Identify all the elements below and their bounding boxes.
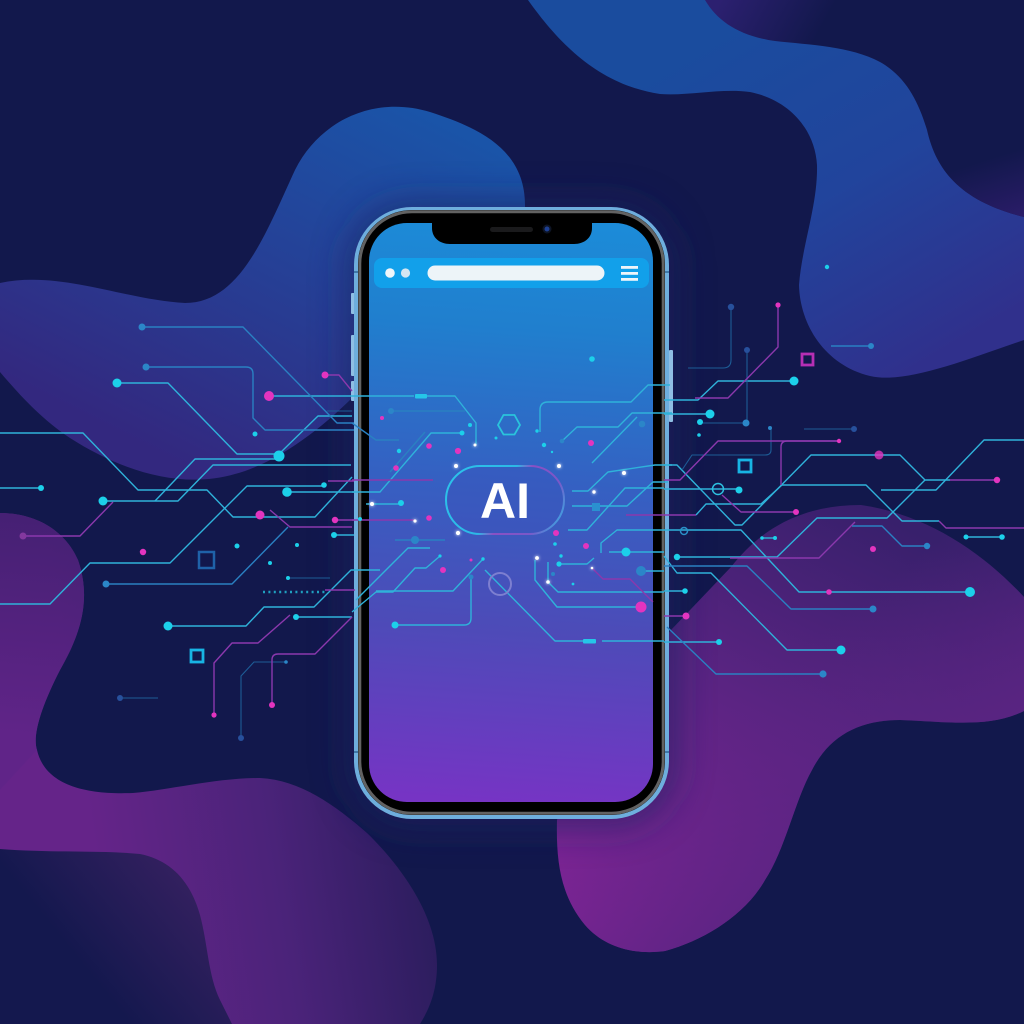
rim notches xyxy=(354,271,669,753)
square node: magenta xyxy=(802,354,813,365)
AI badge xyxy=(446,466,564,534)
dotted trace xyxy=(263,591,325,593)
notch xyxy=(432,220,592,244)
square node: small xyxy=(191,650,203,662)
bezel highlight xyxy=(360,212,663,813)
phone xyxy=(351,207,673,819)
blob: lower left upper tone xyxy=(0,513,84,790)
side buttons xyxy=(351,293,673,422)
camera xyxy=(542,224,552,234)
address field xyxy=(428,266,604,280)
screen xyxy=(369,223,653,802)
blob: lower right purple xyxy=(557,505,1024,952)
menu icon xyxy=(621,266,638,281)
blob: upper right blue xyxy=(528,0,1024,378)
hexagon node xyxy=(498,415,520,434)
blob: lower left dark cutout xyxy=(0,849,232,1024)
ring node xyxy=(712,484,724,494)
blob: upper right corner purple edge xyxy=(927,120,1024,217)
blob: lower left purple xyxy=(0,513,437,1024)
blob: upper right corner shade xyxy=(705,0,1024,217)
circuit network: left side xyxy=(0,324,360,741)
speaker xyxy=(490,227,533,232)
circuit network: inside screen xyxy=(352,356,672,644)
blob: lower right side tone xyxy=(557,505,1024,952)
connector pads xyxy=(415,394,596,644)
square node: cyan xyxy=(739,460,751,472)
purple node xyxy=(20,532,26,540)
phone bezel xyxy=(358,210,665,815)
badge outline xyxy=(446,466,564,534)
AI label: AI xyxy=(480,473,530,529)
browser bar xyxy=(374,258,649,288)
circuit network: right side xyxy=(664,265,1024,678)
circle node xyxy=(489,573,511,595)
phone halo shadow xyxy=(350,205,674,825)
small ring node xyxy=(680,528,688,534)
square node: large xyxy=(199,552,214,568)
blob: upper left blue xyxy=(0,107,525,480)
phone rim xyxy=(354,207,669,819)
